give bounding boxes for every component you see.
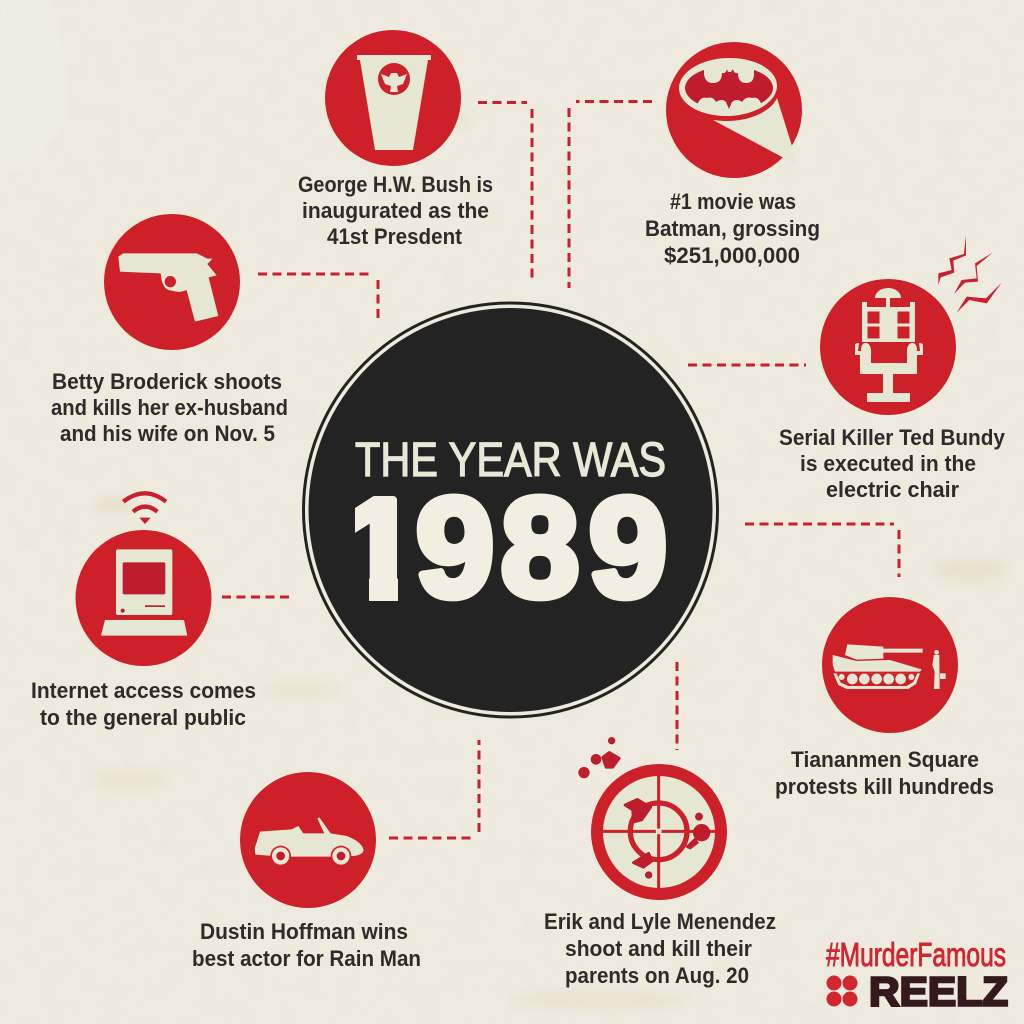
caption: Betty Broderick: Betty Broderick shoots <box>52 369 282 394</box>
caption: Batman: #1 movie was <box>670 189 796 214</box>
icon: convertible car <box>240 772 376 908</box>
caption: Dustin Hoffman: Dustin Hoffman wins <box>200 919 408 944</box>
caption: Ted Bundy <box>779 425 1005 502</box>
central badge <box>304 303 718 717</box>
badge year: 9 <box>416 468 494 626</box>
connector: Bush <box>478 102 532 281</box>
caption: Bush: inaugurated as the <box>302 198 489 223</box>
connector: computer <box>222 596 294 598</box>
badge year: 8 <box>501 468 579 626</box>
caption: Dustin Hoffman: best actor for Rain Man <box>192 946 421 971</box>
panel: Ted Bundy <box>779 235 1005 502</box>
connector: tank <box>745 524 899 577</box>
caption: Batman <box>645 189 820 268</box>
REELZ dots <box>826 976 858 1006</box>
caption: Menendez brothers: shoot and kill their <box>565 936 752 961</box>
icon: electric chair <box>820 279 956 415</box>
icon: presidential podium <box>325 30 461 166</box>
caption: Bush <box>298 172 493 249</box>
panel: Betty Broderick <box>51 214 288 446</box>
caption: Betty Broderick <box>51 369 288 446</box>
icon: tank and man <box>822 597 958 733</box>
icon: pistol <box>104 214 240 350</box>
connector: Batman <box>569 102 652 288</box>
panel: Internet <box>31 493 256 730</box>
caption: Betty Broderick: and kills her ex-husband <box>51 395 288 420</box>
badge heading: THE YEAR WAS <box>355 434 666 487</box>
badge year: 9 <box>589 468 667 626</box>
icon: computer with wifi <box>76 493 212 666</box>
caption: Tiananmen Square <box>775 747 994 799</box>
caption: Batman: $251,000,000 <box>664 243 800 268</box>
panel: Batman <box>645 42 820 268</box>
badge year: 1 <box>341 469 419 627</box>
panel: Tiananmen Square <box>775 597 994 799</box>
caption: Batman: Batman, grossing <box>645 216 820 241</box>
badge year <box>340 468 667 627</box>
connector: car <box>389 740 479 838</box>
panel: Dustin Hoffman <box>192 772 421 971</box>
panel: Bush inauguration <box>298 30 493 249</box>
connector: gun <box>258 274 378 320</box>
icon: lightning bolts <box>938 235 1002 313</box>
REELZ wordmark: REELZ <box>869 968 1008 1014</box>
caption: Internet: to the general public <box>40 705 246 730</box>
caption: Ted Bundy: electric chair <box>826 477 959 502</box>
caption: Bush: 41st Presdent <box>327 224 462 249</box>
caption: Internet <box>31 678 256 730</box>
caption: Ted Bundy: is executed in the <box>800 451 976 476</box>
caption: Dustin Hoffman <box>192 919 421 971</box>
caption: Menendez brothers: parents on Aug. 20 <box>565 963 749 988</box>
icon: target with blood <box>580 738 727 900</box>
caption: Bush: George H.W. Bush is <box>298 172 493 197</box>
logo: hashtag and REELZ <box>826 936 1008 1014</box>
connector: electric chair <box>688 364 806 366</box>
icon: bat signal <box>666 42 802 178</box>
panel: Menendez brothers <box>544 738 776 988</box>
caption: Menendez brothers <box>544 909 776 988</box>
caption: Betty Broderick: and his wife on Nov. 5 <box>60 421 275 446</box>
caption: Tiananmen Square: Tiananmen Square <box>791 747 979 772</box>
connector: target <box>676 662 678 750</box>
caption: Internet: Internet access comes <box>31 678 256 703</box>
caption: Tiananmen Square: protests kill hundreds <box>775 774 994 799</box>
caption: Menendez brothers: Erik and Lyle Menendez <box>544 909 776 934</box>
caption: Ted Bundy: Serial Killer Ted Bundy <box>779 425 1005 450</box>
